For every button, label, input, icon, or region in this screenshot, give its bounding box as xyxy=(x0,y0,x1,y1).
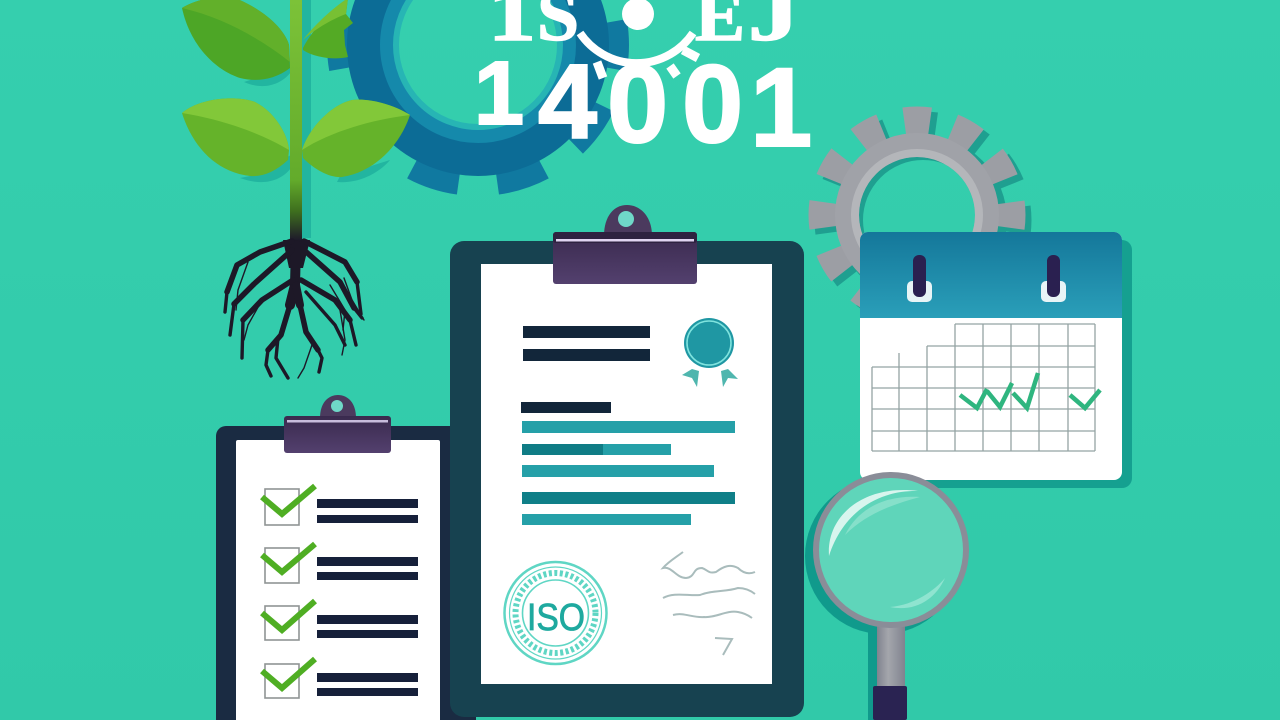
signature xyxy=(663,552,755,655)
clipboard: checklist xyxy=(216,395,476,720)
number 14001: 1 xyxy=(474,44,524,144)
clip hook xyxy=(604,205,652,236)
lens shadow xyxy=(805,478,961,634)
calendar header xyxy=(860,232,1122,318)
roots xyxy=(225,240,364,378)
clip xyxy=(284,416,391,453)
heading bars xyxy=(521,326,650,413)
middle right leaf xyxy=(302,100,410,177)
white gear xyxy=(580,0,698,78)
number 14001: 0 xyxy=(682,43,743,166)
calendar grid xyxy=(872,324,1095,451)
clip xyxy=(553,232,697,284)
icon: magnifying glass xyxy=(805,475,966,720)
calendar xyxy=(860,232,1132,488)
number 14001: 4 xyxy=(538,43,597,161)
calendar shadow xyxy=(870,240,1132,488)
stem shadow xyxy=(302,0,311,238)
calendar rings xyxy=(907,255,1066,302)
lens highlights xyxy=(829,490,918,556)
upper left leaf xyxy=(182,0,290,80)
icon: rosette xyxy=(682,318,738,387)
body bars xyxy=(522,421,735,525)
board xyxy=(450,241,804,717)
checklist rows xyxy=(262,486,418,698)
lens xyxy=(816,475,966,625)
stem xyxy=(290,0,302,240)
ISO seal xyxy=(504,562,606,664)
clipboard: main certificate xyxy=(450,205,804,717)
paper xyxy=(236,440,440,720)
calendar page xyxy=(860,232,1122,480)
upper right leaf xyxy=(303,0,353,58)
calendar check marks xyxy=(960,373,1100,408)
number 14001: 1 xyxy=(750,45,812,170)
leaf shadows xyxy=(240,60,390,182)
icon: grey gear xyxy=(822,120,1018,315)
clip hook xyxy=(320,395,356,418)
board xyxy=(216,426,476,720)
title: ISO 14001 xyxy=(474,0,812,170)
number 14001 xyxy=(474,43,812,170)
icon: plant with roots xyxy=(182,0,410,378)
garbled top line xyxy=(488,0,800,57)
icon: blue gear xyxy=(340,0,616,183)
number 14001: 0 xyxy=(607,43,668,166)
handle xyxy=(877,622,905,688)
ISO seal: ISO xyxy=(527,597,585,639)
paper xyxy=(481,264,772,684)
middle left leaf xyxy=(182,98,289,176)
